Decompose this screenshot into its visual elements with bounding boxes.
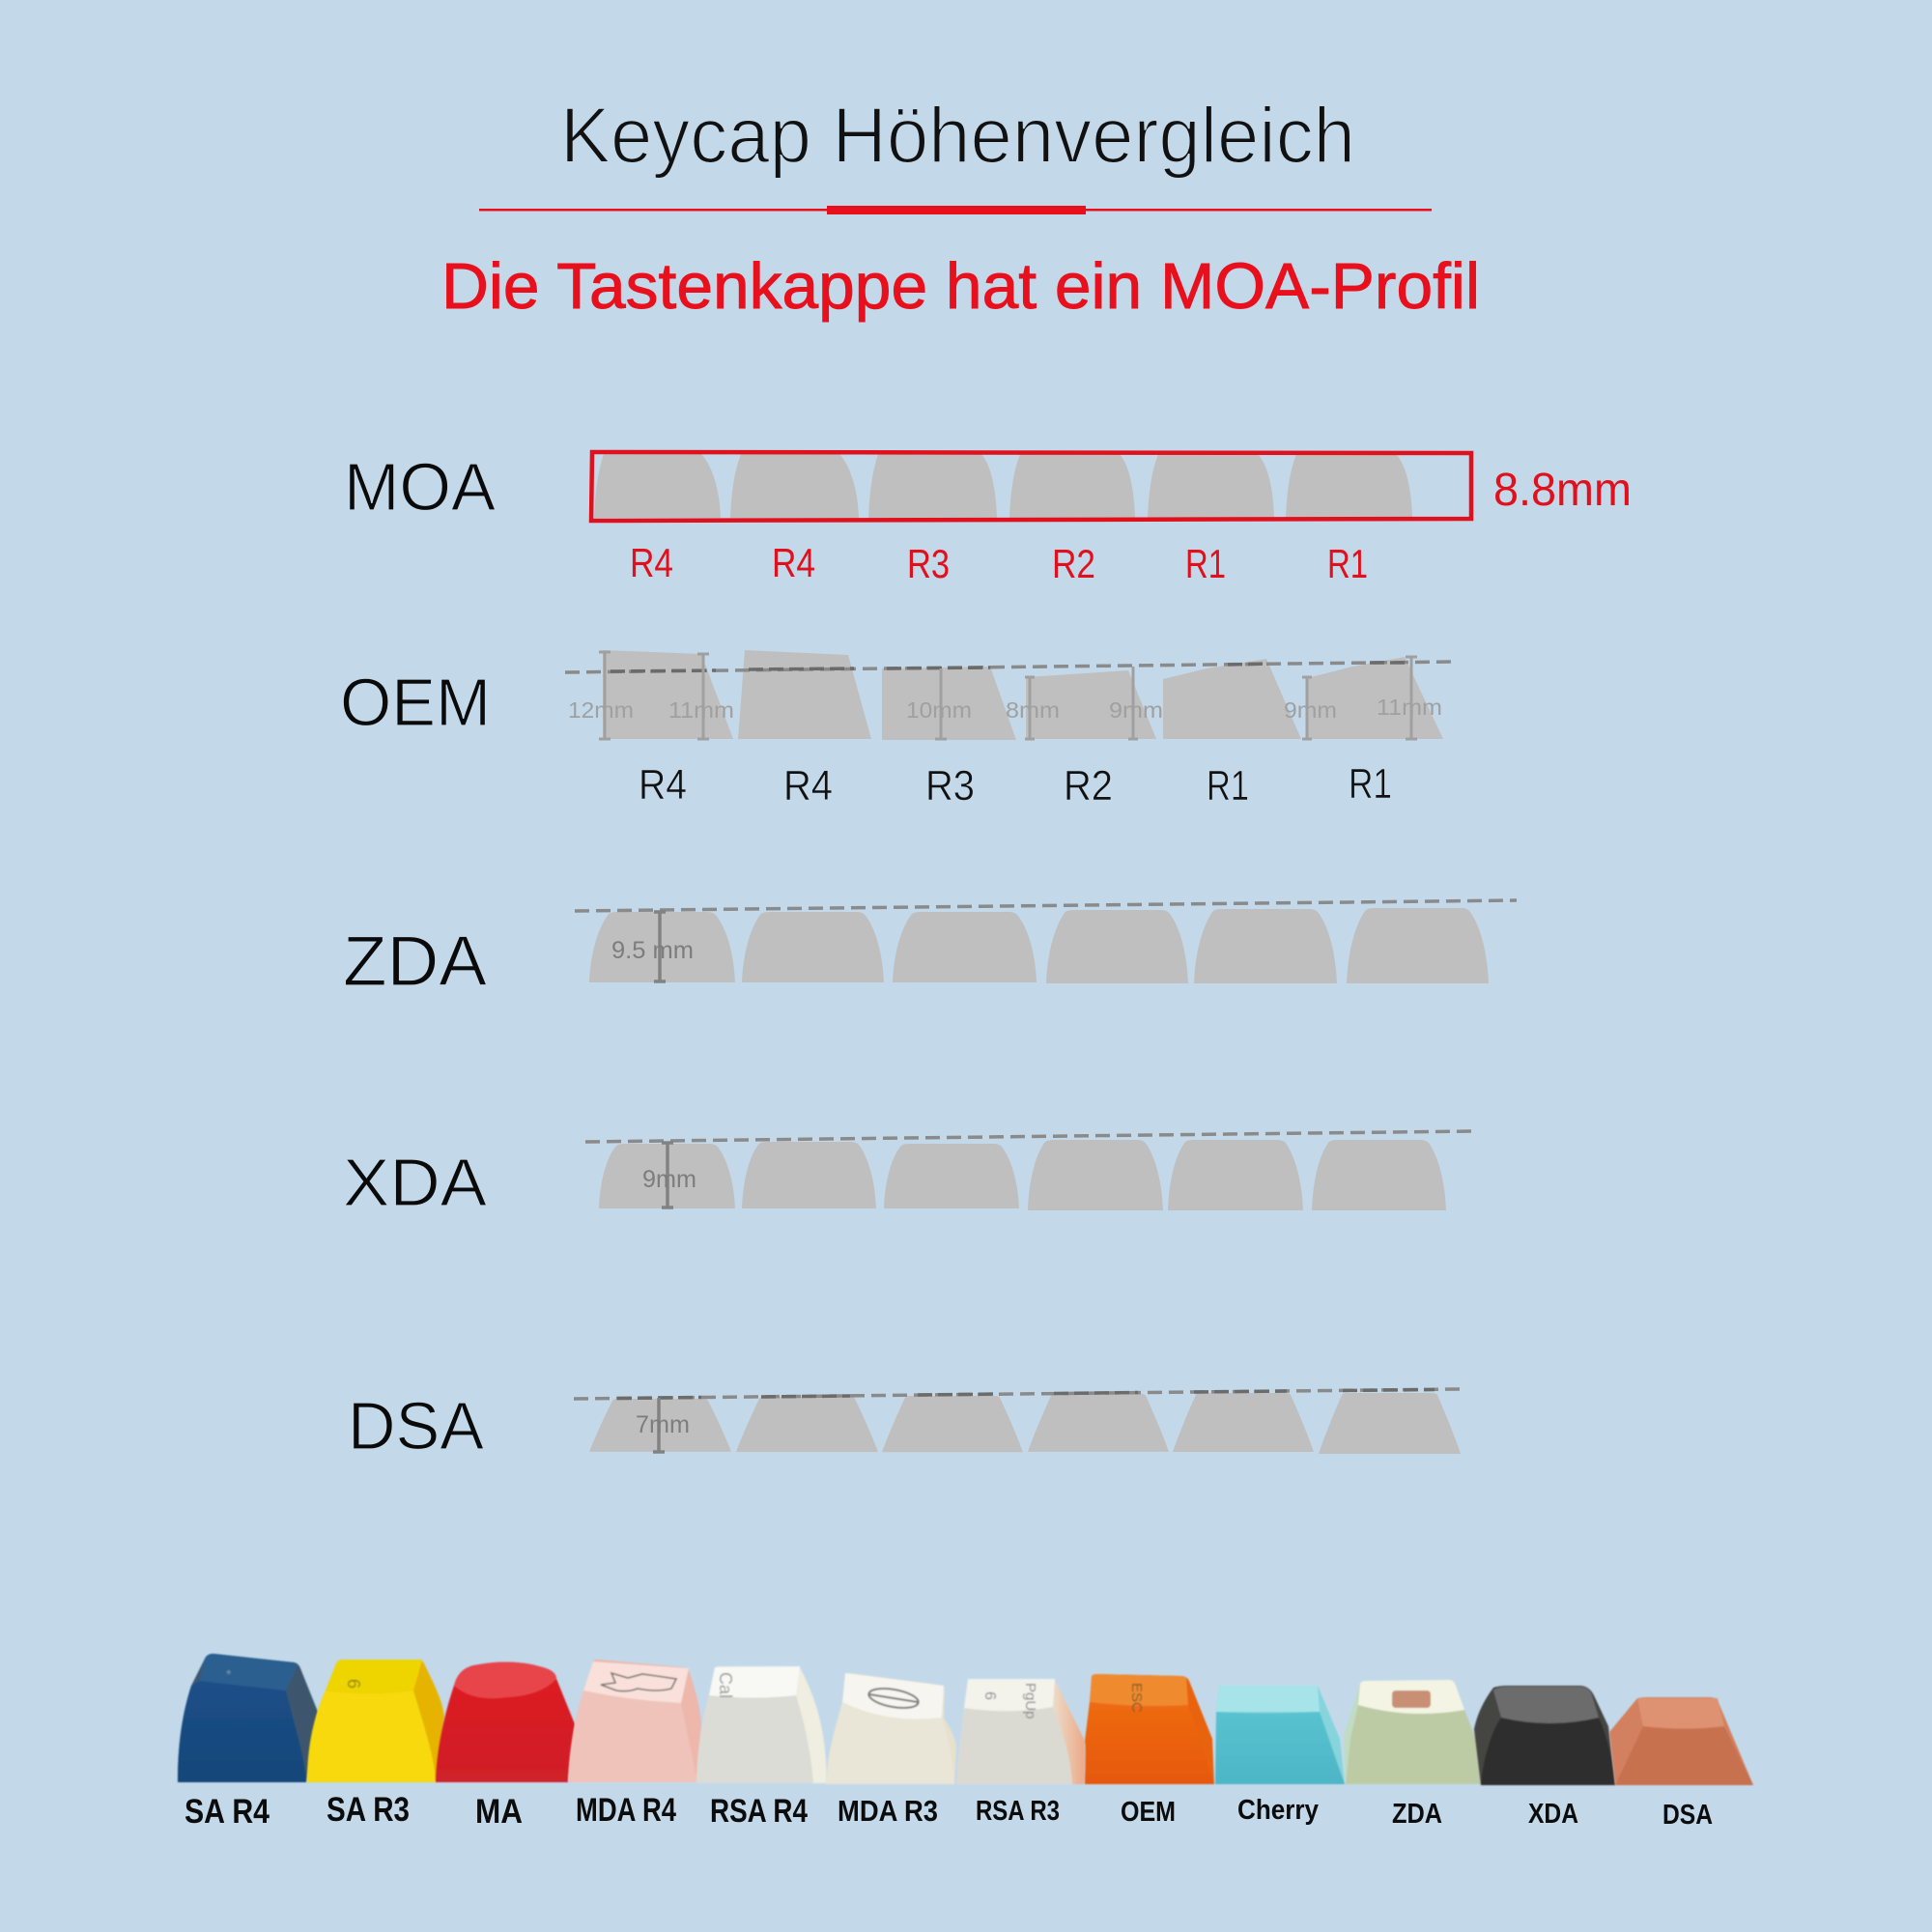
- keycap labels: OEM: [1121, 1797, 1176, 1828]
- heading: DSA: DSA: [348, 1388, 484, 1463]
- dimension bars: OEM: [599, 652, 1417, 739]
- keycap: XDA: [1474, 1686, 1615, 1785]
- row labels: MOA: R4: [630, 540, 673, 585]
- panel: keycap photo lineup: [178, 1654, 1753, 1831]
- row labels: OEM: R4: [639, 761, 687, 809]
- row labels: OEM: R1: [1207, 762, 1249, 810]
- keycap profiles: OEM: [603, 650, 1443, 740]
- keycap: DSA: [1609, 1697, 1753, 1785]
- height value: 8.8mm: 8.8mm: [1493, 465, 1632, 516]
- keycap labels: MDA R3: [838, 1794, 938, 1828]
- row labels: OEM: R3: [925, 762, 975, 810]
- keycap labels: XDA: [1528, 1799, 1578, 1830]
- dimension values: OEM: 11mm: [1377, 695, 1442, 720]
- row labels: MOA: R4: [772, 540, 815, 585]
- row labels: MOA: R1: [1185, 541, 1226, 586]
- keycap labels: ZDA: [1392, 1799, 1442, 1830]
- dimension value: 9mm: 9mm: [642, 1166, 696, 1193]
- row labels: OEM: R1: [1349, 760, 1392, 808]
- dimension bar: XDA: [662, 1143, 673, 1208]
- heading: XDA: XDA: [343, 1145, 487, 1220]
- keycap labels: RSA R4: [710, 1793, 808, 1830]
- reference line: XDA: [585, 1131, 1472, 1142]
- keycap: OEM: ESC: [1128, 1683, 1145, 1713]
- keycap profiles: MOA: [594, 454, 1412, 518]
- dimension values: OEM: [568, 695, 1442, 723]
- row labels: OEM: [639, 760, 1392, 810]
- heading: MOA: MOA: [344, 449, 496, 525]
- keycap labels: MA: [475, 1793, 523, 1831]
- keycap labels: DSA: [1662, 1800, 1713, 1831]
- keycap: RSA R3: PgUp: [1022, 1683, 1038, 1719]
- panel: OEM profile row: [340, 650, 1452, 810]
- keycap: RSA R4: [696, 1666, 827, 1783]
- keycap: SA R4: [178, 1654, 318, 1782]
- keycap: OEM: [1085, 1674, 1214, 1784]
- keycap: MDA R4: [568, 1660, 701, 1782]
- keycap profiles: DSA: [589, 1393, 1461, 1454]
- reference line: ZDA: [575, 900, 1517, 911]
- panel: XDA profile row: [343, 1131, 1472, 1220]
- keycap labels: MDA R4: [576, 1792, 676, 1829]
- row labels: MOA: R1: [1327, 541, 1368, 586]
- dimension values: OEM: 9mm: [1284, 697, 1337, 723]
- dimension values: OEM: 10mm: [906, 697, 972, 723]
- keycap: MDA R3: [826, 1673, 956, 1784]
- keycap labels: [185, 1791, 1713, 1831]
- keycap labels: RSA R3: [976, 1796, 1060, 1827]
- reference line: DSA: [574, 1389, 1461, 1399]
- dimension bar: DSA: [653, 1398, 665, 1452]
- heading: ZDA: ZDA: [343, 923, 487, 1001]
- title: Keycap Höhenvergleich: [560, 92, 1355, 180]
- dimension bar: ZDA: [654, 912, 666, 981]
- dimension values: OEM: 11mm: [668, 697, 734, 723]
- keycap: SA R4: *: [226, 1666, 232, 1682]
- row labels: MOA: [630, 540, 1368, 586]
- panel: DSA profile row: [348, 1388, 1461, 1463]
- dimension value: 7mm: 7mm: [636, 1411, 690, 1438]
- dimension value: 9.5mm: 9.5 mm: [611, 937, 694, 964]
- keycap labels: SA R3: [327, 1791, 410, 1829]
- keycap: RSA R3: 6: [981, 1691, 998, 1700]
- subtitle: Die Tastenkappe hat ein MOA-Profil: [441, 250, 1480, 323]
- panel: ZDA profile row: [343, 900, 1517, 1001]
- row labels: MOA: R3: [907, 541, 950, 586]
- keycap profiles: ZDA: [589, 908, 1489, 983]
- red height frame: [591, 452, 1471, 521]
- keycap profiles: XDA: [599, 1140, 1446, 1210]
- dimension values: OEM: 8mm: [1006, 697, 1060, 723]
- row labels: MOA: R2: [1052, 541, 1095, 586]
- keycap: SA R3: 6: [344, 1679, 363, 1689]
- keycap: MA: [436, 1662, 575, 1782]
- title underline: [479, 206, 1432, 214]
- keycap: Cherry: [1215, 1686, 1345, 1784]
- keycap: RSA R4: Cal: [716, 1672, 735, 1698]
- keycap: SA R3: [307, 1660, 444, 1782]
- keycap: ZDA: [1344, 1680, 1481, 1784]
- heading: OEM: OEM: [340, 665, 491, 740]
- row labels: OEM: R2: [1064, 762, 1113, 810]
- reference line: OEM: [565, 662, 1452, 672]
- keycap labels: Cherry: [1237, 1795, 1319, 1826]
- panel: MOA profile row: [344, 449, 1632, 586]
- keycap labels: SA R4: [185, 1793, 270, 1831]
- row labels: OEM: R4: [783, 762, 833, 810]
- keycap: RSA R3: [956, 1679, 1085, 1784]
- dimension values: OEM: 9mm: [1109, 697, 1163, 723]
- dimension values: OEM: 12mm: [568, 697, 634, 723]
